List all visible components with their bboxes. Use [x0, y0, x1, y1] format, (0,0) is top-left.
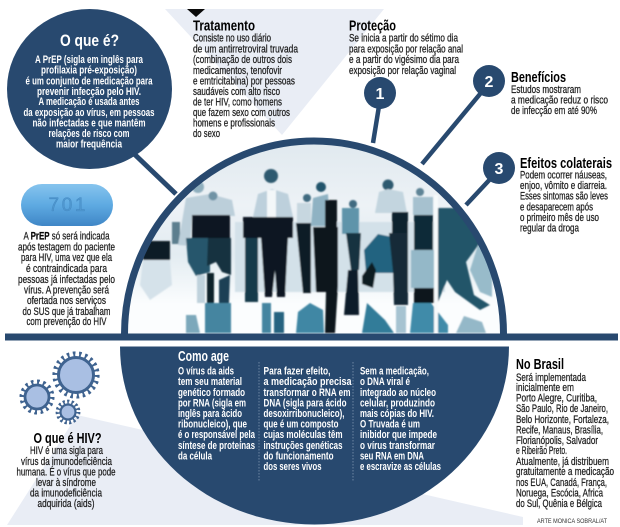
block: Proteção: Proteção: [349, 18, 396, 34]
icon: virus cluster: [20, 352, 98, 424]
icon: blue pill: [21, 184, 113, 226]
block: O que é HIV: levar à síndrome: [36, 477, 96, 489]
text: definition: profilaxia pré-exposição): [41, 64, 137, 76]
text: column 1: da célula: [178, 450, 213, 462]
text: PrEP note: pessoas já infectadas pelo: [18, 274, 115, 286]
text: column 1: ribonucleico), que: [178, 418, 247, 430]
block: Efeitos colaterais: [520, 156, 612, 234]
block: Benefícios: [511, 70, 608, 117]
block: Tratamento: [193, 18, 299, 140]
block: O que é HIV: vírus da imunodeficiência: [21, 456, 113, 468]
block: Proteção: Se inicia a partir do sétimo dia: [349, 32, 459, 44]
block: Benefícios: Estudos mostraram: [511, 84, 581, 96]
text: definition: não infectadas e que mantêm: [32, 118, 146, 130]
block: Tratamento: do sexo: [193, 128, 220, 140]
text: column 2: que é um composto: [264, 418, 339, 430]
panel: O que é circle: [7, 9, 172, 169]
panel: photo of business people in dome: [132, 144, 496, 334]
block: Tratamento: (combinação de outros dois: [193, 54, 292, 66]
text: column 1: tem seu material: [178, 376, 242, 388]
text: column 2: desoxirribonucleico),: [264, 408, 344, 420]
block: No Brasil: inicialmente em: [516, 382, 574, 394]
marker: black triangle: [187, 9, 205, 17]
text: definition: relações de risco com: [48, 128, 130, 140]
horizontal divider bar: [5, 334, 618, 340]
block: O que é HIV: HIV é uma sigla para: [30, 445, 104, 457]
block: O que é HIV: O que é HIV?: [34, 431, 102, 447]
text: column 2: do funcionamento: [264, 450, 334, 462]
text: column 3: o vírus transformar: [360, 440, 436, 452]
text: column 2: instruções genéticas: [264, 440, 342, 452]
text: column 3: mais cópias do HIV.: [360, 408, 434, 420]
text: column 1: O vírus da aids: [178, 366, 234, 378]
block: O que é HIV: [16, 431, 116, 510]
dome outline arc: [124, 141, 504, 334]
text: column 1: [178, 366, 256, 462]
block: O que é HIV: adquirida (aids): [38, 498, 94, 510]
block: Tratamento: de ter HIV, como homens: [193, 96, 282, 108]
block: Proteção: exposição por relação vaginal: [349, 65, 456, 77]
text: PrEP note: para HIV, uma vez que ela: [21, 252, 113, 264]
text: definition: A medicação é usada antes: [38, 96, 140, 108]
background: light top triangle: [165, 9, 384, 135]
text: column 1: genético formado: [178, 387, 245, 399]
panel: Como age semicircle: [120, 346, 509, 524]
text: column 3: o DNA viral é: [360, 376, 410, 388]
block: No Brasil: [516, 357, 614, 510]
text: definition: da exposição ao vírus, em pessoas: [24, 107, 154, 119]
block: Tratamento: saudáveis com alto risco: [193, 86, 280, 98]
text: PrEP note: ofertada nos serviços: [27, 295, 106, 307]
text: PrEP note: A PrEP só será indicada: [24, 230, 110, 242]
text: column 3: integrado ao núcleo: [360, 387, 436, 399]
text: column 3: celular, produzindo: [360, 398, 435, 410]
block: Proteção: [349, 18, 463, 77]
text: column 3: [360, 366, 441, 473]
text: column 1: inglês para ácido: [178, 408, 242, 420]
block: Tratamento: que fazem sexo com outros: [193, 107, 290, 119]
text: column 1: síntese de proteínas: [178, 440, 255, 452]
block: Tratamento: Consiste no uso diário: [193, 32, 271, 44]
block: Tratamento: homens e profissionais: [193, 118, 275, 130]
text: column 3: O Truvada é um: [360, 418, 420, 430]
marker 2: [422, 65, 505, 164]
text: definition: [24, 54, 154, 150]
text: column 3: seu RNA em DNA: [360, 450, 424, 462]
connector: O que é: [128, 148, 176, 194]
heading: O que é: O que é?: [60, 32, 119, 50]
block: No Brasil: Será implementada: [516, 372, 587, 384]
block: Tratamento: e emtricitabina) por pessoas: [193, 76, 295, 88]
block: Proteção: para exposição por relação anal: [349, 44, 463, 56]
block: O que é HIV: humana. É o vírus que pode: [16, 466, 116, 478]
text: column 2: transformar o RNA em: [264, 387, 351, 399]
text: definition: prevenir infecção pelo HIV.: [37, 86, 141, 98]
text: definition: A PrEP (sigla em inglês para: [35, 54, 144, 66]
block: Efeitos colaterais: e desaparecem após: [520, 202, 593, 214]
block: Tratamento: Tratamento: [193, 18, 255, 34]
credit: ARTE MONICA SOBRAL/AT: [537, 518, 607, 525]
text: column 1: é o responsável pela: [178, 429, 256, 441]
text: column 2: a medicação precisa: [264, 376, 352, 388]
text: definition: é um conjunto de medicação para: [26, 76, 153, 88]
marker 3: [466, 152, 515, 205]
background: light bottom triangle: [7, 415, 523, 525]
text: column 2: [264, 366, 352, 473]
text: column 3: inibidor que impede: [360, 429, 437, 441]
text: column 2: Para fazer efeito,: [264, 366, 330, 378]
text: PrEP note: do SUS que já trabalham: [22, 306, 110, 318]
block: Tratamento: de um antirretroviral truvada: [193, 44, 299, 56]
text: column 1: por RNA (sigla em: [178, 398, 246, 410]
block: Benefícios: Benefícios: [511, 70, 566, 86]
icon: blue pill: 701: [48, 195, 86, 216]
text: PrEP note: com prevenção do HIV: [26, 316, 107, 328]
heading: Como age: Como age: [178, 349, 229, 365]
text: column 3: e escravize as células: [360, 461, 441, 473]
block: No Brasil: No Brasil: [516, 357, 564, 373]
block: O que é HIV: da imunodeficiência: [30, 488, 103, 500]
marker 1: [364, 77, 396, 143]
text: column 3: Sem a medicação,: [360, 366, 429, 378]
text: column 2: cujas moléculas têm: [264, 429, 343, 441]
text: column 2: DNA (sigla para ácido: [264, 398, 347, 410]
block: Tratamento: medicamentos, tenofovir: [193, 65, 282, 77]
block: No Brasil: e Ribeirão Preto.: [516, 445, 567, 457]
text: PrEP note: vírus. A prevenção será: [24, 284, 110, 296]
block: Efeitos colaterais: regular da droga: [520, 222, 580, 234]
marker 3: 3: [495, 161, 504, 178]
marker 1: 1: [376, 86, 385, 103]
text: column 2: dos seres vivos: [264, 461, 322, 473]
text: definition: maior frequência: [56, 138, 123, 150]
marker 2: 2: [485, 74, 494, 91]
text: PrEP note: [18, 230, 115, 328]
block: Proteção: e a partir do vigésimo dia para: [349, 54, 460, 66]
text: PrEP note: após testagem do paciente: [18, 242, 115, 254]
text: PrEP note: é contraindicada para: [26, 263, 108, 275]
